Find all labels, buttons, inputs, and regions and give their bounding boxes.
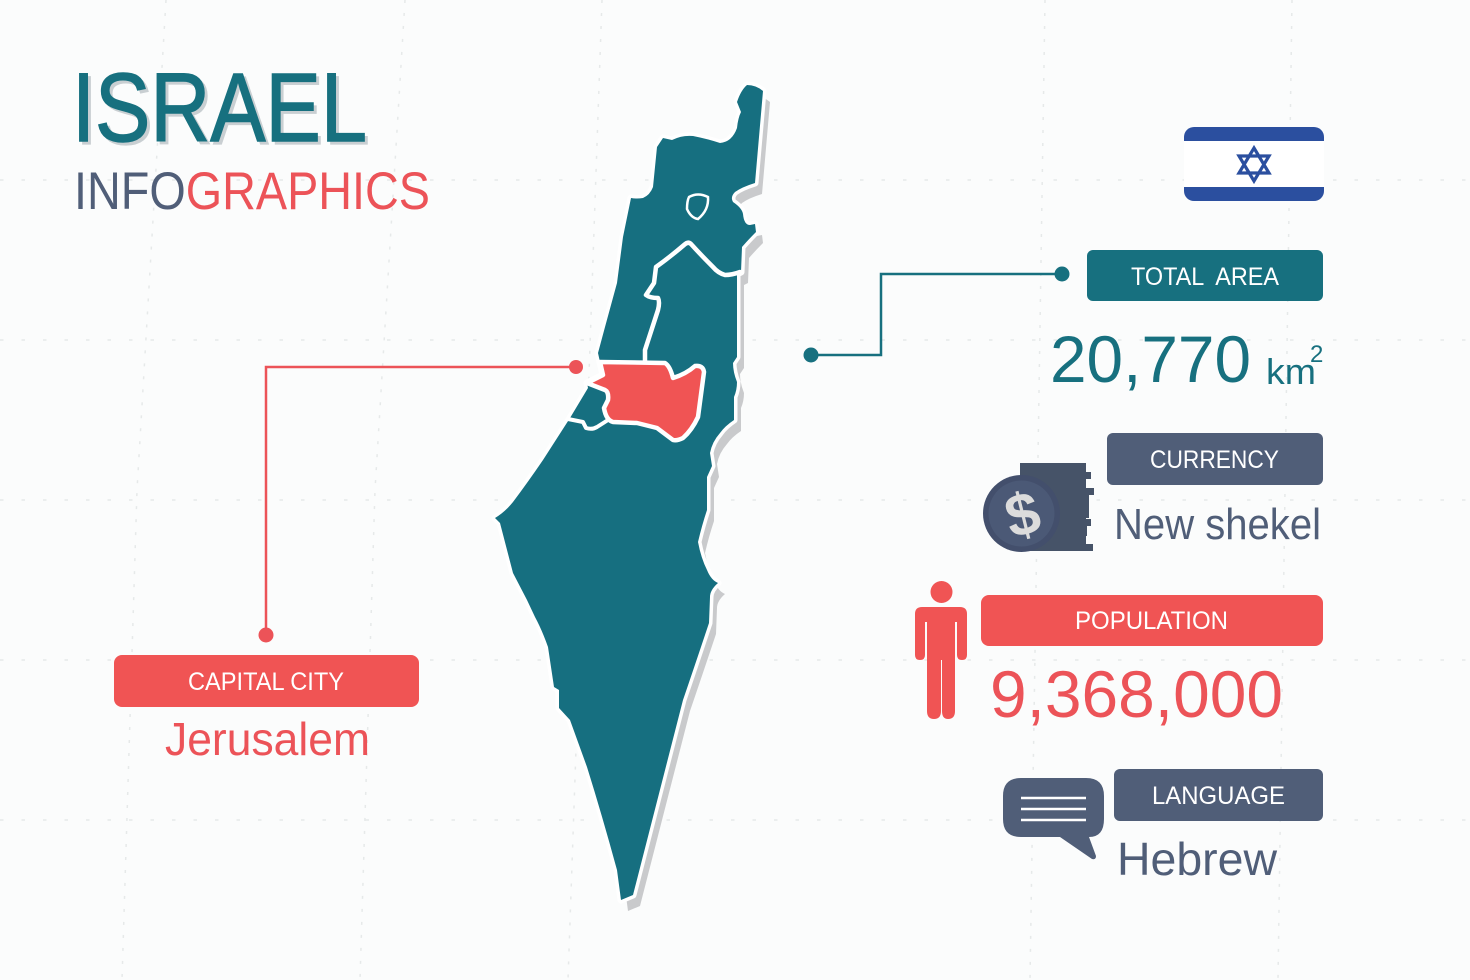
icon: coins: $ (998, 478, 1047, 551)
value: capital city: Jerusalem (165, 713, 370, 765)
flag of Israel (1184, 127, 1324, 201)
title: ISRAEL (75, 56, 370, 165)
panel: total area (1087, 250, 1323, 301)
icon: coins (983, 463, 1094, 552)
value: total area: 20,770 (1050, 322, 1251, 396)
icon: speech bubble (1003, 778, 1104, 859)
connector: total area (804, 266, 1070, 362)
connector: capital city (258, 360, 583, 642)
panel: total area: TOTAL AREA (1131, 263, 1279, 291)
highlighted region (587, 362, 704, 440)
map of Israel (495, 85, 770, 911)
icon: person (915, 581, 967, 719)
value: total area: km (1266, 351, 1316, 392)
value: language: Hebrew (1117, 833, 1278, 885)
title: ISRAEL (72, 53, 367, 162)
value: currency: New shekel (1114, 500, 1321, 549)
value: population: 9,368,000 (990, 657, 1283, 731)
southern divider (568, 419, 608, 429)
panel: capital city: CAPITAL CITY (188, 668, 344, 696)
map shadow (502, 96, 770, 911)
lake (687, 194, 708, 219)
panel: language (1114, 769, 1323, 821)
panel: language: LANGUAGE (1152, 782, 1285, 810)
subtitle: INFOGRAPHICS (74, 162, 430, 221)
panel: currency: CURRENCY (1150, 446, 1279, 474)
panel: capital city (114, 655, 419, 707)
region divider (645, 243, 740, 364)
panel: population (981, 595, 1323, 646)
value: total area: 2 (1310, 341, 1323, 368)
map body (495, 85, 763, 900)
panel: population: POPULATION (1075, 607, 1228, 635)
panel: currency (1107, 433, 1323, 485)
